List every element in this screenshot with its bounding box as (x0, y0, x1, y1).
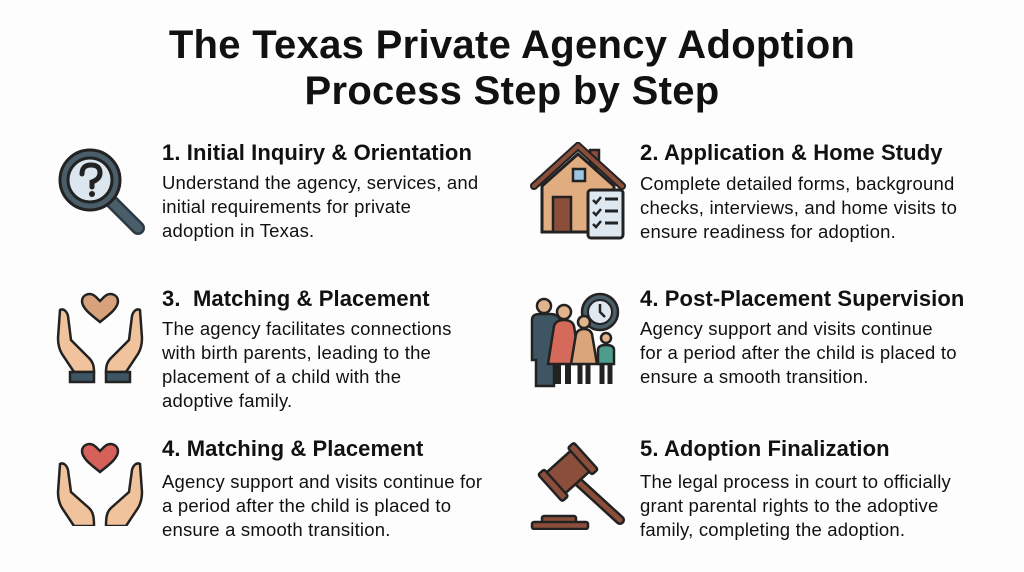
text: a period after the child is placed to (162, 495, 451, 516)
step 4 right: 4. Post-Placement Supervision (640, 286, 964, 311)
title: Process Step by Step (304, 69, 720, 113)
icon: family with clock (530, 292, 620, 388)
title: The Texas Private Agency Adoption (169, 23, 855, 67)
step 3: 3. Matching & Placement (162, 286, 430, 311)
text: placement of a child with the (162, 366, 401, 387)
icon: magnifier (58, 148, 145, 235)
text: family, completing the adoption. (640, 519, 905, 540)
text: ensure a smooth transition. (162, 519, 391, 540)
text: adoptive family. (162, 390, 292, 411)
text: The legal process in court to officially (640, 471, 951, 492)
step 5: 5. Adoption Finalization (640, 436, 890, 461)
icon: hands with heart (56, 292, 144, 384)
step 1: 1. Initial Inquiry & Orientation (162, 140, 472, 165)
step 4 left: 4. Matching & Placement (162, 436, 423, 461)
text: ensure readiness for adoption. (640, 221, 896, 242)
text: initial requirements for private (162, 196, 411, 217)
text: ensure a smooth transition. (640, 366, 869, 387)
text: checks, interviews, and home visits to (640, 197, 957, 218)
text: with birth parents, leading to the (162, 342, 431, 363)
icon: gavel (530, 442, 625, 530)
text: Understand the agency, services, and (162, 172, 478, 193)
text: Complete detailed forms, background (640, 173, 954, 194)
text: Agency support and visits continue for (162, 471, 482, 492)
icon: hands with red heart (56, 442, 144, 526)
text: The agency facilitates connections (162, 318, 452, 339)
text: adoption in Texas. (162, 220, 314, 241)
icon: house with checklist (530, 142, 626, 240)
title (169, 23, 855, 113)
text: for a period after the child is placed to (640, 342, 957, 363)
step 2: 2. Application & Home Study (640, 140, 943, 165)
text: grant parental rights to the adoptive (640, 495, 938, 516)
text: Agency support and visits continue (640, 318, 933, 339)
